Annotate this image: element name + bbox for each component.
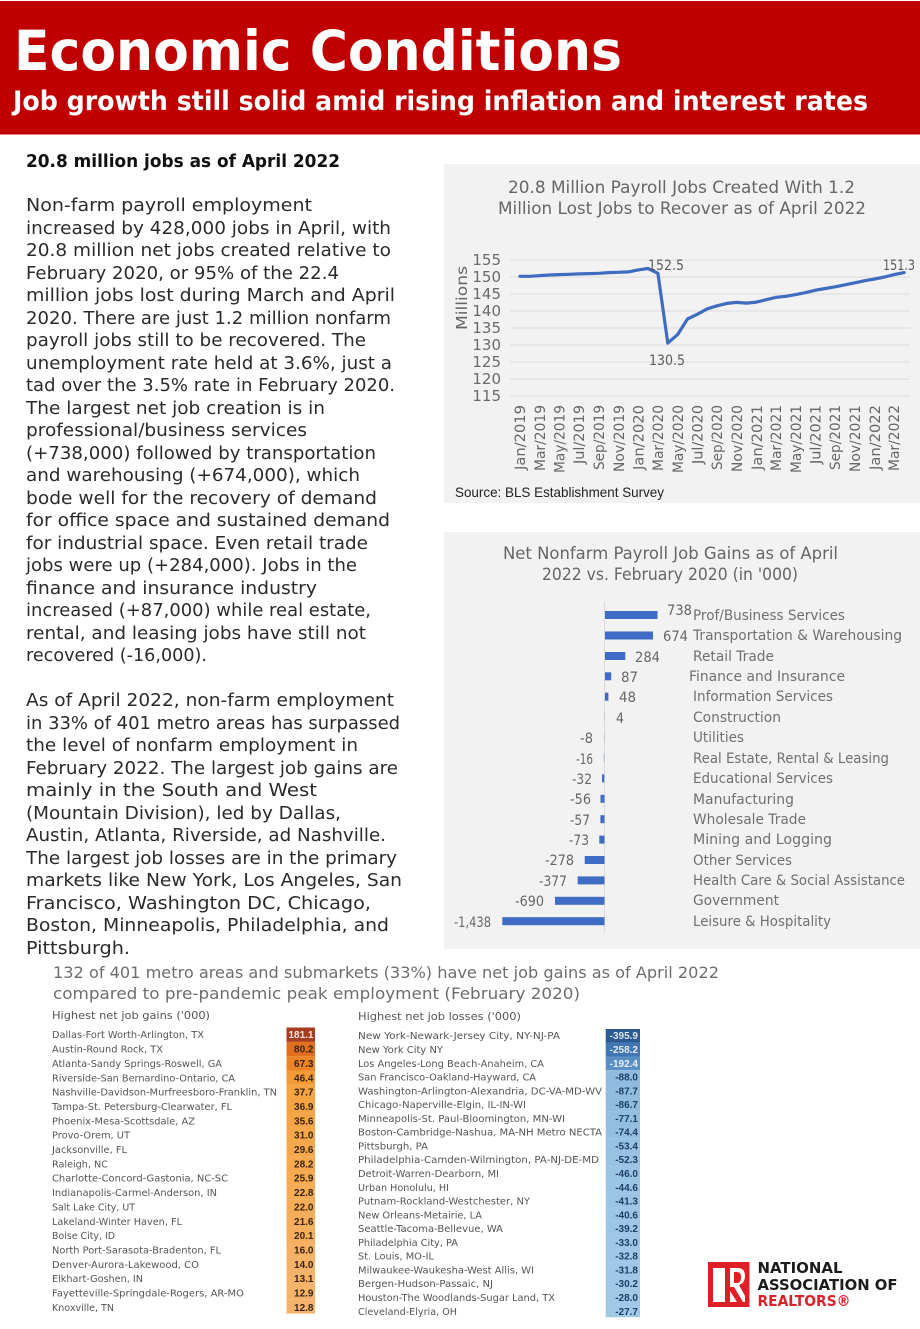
value labels: -32 [572, 772, 592, 788]
value cells: -395.9 [610, 1031, 638, 1042]
metro names: Philadelphia City, PA [358, 1238, 458, 1249]
logo wordmark: ASSOCIATION OF [758, 1276, 898, 1294]
text block: metro areas paragraph: markets like New York, Los Angeles, San [26, 871, 402, 891]
metro names: Indianapolis-Carmel-Anderson, IN [52, 1188, 217, 1199]
category labels: Transportation & Warehousing [692, 628, 902, 644]
x axis labels: Jul/2020 [690, 405, 706, 465]
value labels: -278 [545, 853, 574, 869]
value cells: 37.7 [294, 1088, 314, 1099]
text block: job growth paragraph: tad over the 3.5% rate in February 2020. [26, 376, 395, 396]
metro names: Atlanta-Sandy Springs-Roswell, GA [52, 1059, 222, 1070]
text block: job growth paragraph: recovered (-16,000). [26, 646, 207, 666]
metro names: Riverside-San Bernardino-Ontario, CA [52, 1073, 235, 1084]
title: Economic Conditions [14, 19, 622, 83]
logo: National Association of Realtors [708, 1259, 898, 1310]
text block: metro areas paragraph: Boston, Minneapolis, Philadelphia, and [26, 916, 389, 936]
x axis labels: Jan/2022 [868, 405, 884, 471]
text block: job growth paragraph: increased by 428,000 jobs in April, with [26, 219, 391, 239]
category labels: Utilities [693, 730, 744, 746]
text block: job growth paragraph: February 2020, or 95% of the 22.4 [26, 264, 339, 284]
category labels [689, 608, 905, 930]
panel: payroll jobs line chart [444, 164, 920, 503]
metro names: New York-Newark-Jersey City, NY-NJ-PA [358, 1031, 560, 1042]
text block: job growth paragraph: (+738,000) followed by transportation [26, 444, 376, 464]
metro tables heading: compared to pre-pandemic peak employment (February 2020) [53, 985, 580, 1003]
y axis labels: 130 [472, 336, 501, 354]
category labels: Government [693, 893, 779, 909]
value cells: -39.2 [615, 1224, 638, 1235]
chart title [498, 178, 866, 218]
value cells: 25.9 [294, 1174, 314, 1185]
value labels: 87 [621, 670, 638, 686]
value cells: -87.7 [615, 1086, 638, 1097]
value cells: -46.0 [615, 1169, 638, 1180]
text block: metro areas paragraph: (Mountain Division), led by Dallas, [26, 804, 341, 824]
metro names: Elkhart-Goshen, IN [52, 1274, 143, 1285]
logo wordmark [758, 1259, 898, 1310]
value labels: 48 [619, 690, 636, 706]
metro tables heading: 132 of 401 metro areas and submarkets (33%) have net job gains as of April 2022 [53, 964, 719, 982]
metro names: Detroit-Warren-Dearborn, MI [358, 1169, 499, 1180]
text block: metro areas paragraph: Francisco, Washington DC, Chicago, [26, 894, 371, 914]
value labels: -377 [539, 874, 567, 890]
x axis labels: May/2021 [789, 405, 805, 473]
chart title [503, 544, 838, 584]
icon: R block mark [708, 1262, 750, 1307]
value cells: 28.2 [294, 1159, 314, 1170]
metro names: Knoxville, TN [52, 1303, 114, 1314]
metro names: Dallas-Fort Worth-Arlington, TX [52, 1030, 204, 1041]
metro names: Jacksonville, FL [51, 1145, 128, 1156]
x axis labels [513, 405, 903, 473]
value cells: 46.4 [294, 1073, 314, 1084]
table heading: Highest net job losses ('000) [358, 1011, 521, 1023]
value cells: 181.1 [288, 1030, 314, 1041]
value cells: -33.0 [615, 1238, 638, 1249]
text block: job growth paragraph: rental, and leasing jobs have still not [26, 624, 366, 644]
text block: job growth paragraph: unemployment rate held at 3.6%, just a [26, 354, 392, 374]
category labels: Finance and Insurance [689, 669, 845, 685]
value cells: 29.6 [294, 1145, 314, 1156]
text block: metro areas paragraph: The largest job losses are in the primary [25, 849, 397, 869]
payroll employment line [520, 268, 904, 343]
value cells: -52.3 [615, 1155, 638, 1166]
metro names: Tampa-St. Petersburg-Clearwater, FL [51, 1102, 233, 1113]
text block: job growth paragraph: 2020. There are just 1.2 million nonfarm [26, 309, 391, 329]
value cells: -28.0 [615, 1293, 638, 1304]
metro names: Los Angeles-Long Beach-Anaheim, CA [358, 1059, 544, 1070]
value cells: -31.8 [615, 1266, 638, 1276]
metro names: St. Louis, MO-IL [358, 1252, 435, 1263]
metro names: Milwaukee-Waukesha-West Allis, WI [358, 1266, 534, 1276]
value cells: -32.8 [615, 1252, 638, 1263]
metro names: Bergen-Hudson-Passaic, NJ [358, 1279, 493, 1290]
text block: job growth paragraph: The largest net job creation is in [25, 399, 325, 419]
value cells: 16.0 [294, 1246, 314, 1256]
chart title: Net Nonfarm Payroll Job Gains as of April [503, 544, 838, 563]
data labels: 152.5 [648, 258, 684, 274]
bars [502, 611, 658, 925]
x axis labels: Sep/2020 [710, 405, 726, 470]
metro names: Boise City, ID [52, 1231, 115, 1242]
value cells: 31.0 [294, 1131, 314, 1142]
y axis labels: 155 [472, 251, 501, 269]
table heading: Highest net job gains ('000) [52, 1010, 210, 1022]
text block: job growth paragraph: finance and insurance industry [26, 579, 317, 599]
category labels: Leisure & Hospitality [693, 914, 831, 930]
chart title: 20.8 Million Payroll Jobs Created With 1.2 [508, 178, 855, 197]
metro names: Austin-Round Rock, TX [52, 1045, 163, 1056]
category labels: Mining and Logging [693, 832, 832, 848]
metro names: Nashville-Davidson-Murfreesboro-Franklin, TN [52, 1088, 277, 1099]
value cells: -258.2 [610, 1045, 638, 1056]
metro names: Chicago-Naperville-Elgin, IL-IN-WI [358, 1100, 526, 1111]
value labels: -56 [570, 792, 591, 808]
metro names: San Francisco-Oakland-Hayward, CA [358, 1072, 536, 1084]
metro names: Salt Lake City, UT [52, 1202, 135, 1213]
value cells: -44.6 [615, 1183, 638, 1194]
value cells: 21.6 [294, 1217, 314, 1228]
text block: job growth paragraph: professional/business services [26, 421, 307, 441]
value labels: 738 [667, 603, 692, 619]
metro names: New York City NY [358, 1045, 443, 1056]
metro names: Charlotte-Concord-Gastonia, NC-SC [52, 1174, 228, 1185]
table: highest net job gains [51, 1010, 315, 1314]
category labels: Health Care & Social Assistance [693, 873, 905, 889]
text block: metro areas paragraph: As of April 2022, non-farm employment [26, 691, 394, 711]
x axis labels: Nov/2020 [730, 405, 746, 472]
value cells: 80.2 [294, 1045, 314, 1056]
category labels: Other Services [693, 853, 792, 869]
metro names: Minneapolis-St. Paul-Bloomington, MN-WI [358, 1114, 565, 1125]
text block: metro areas paragraph: Pittsburgh. [26, 939, 130, 959]
section heading: 20.8 million jobs as of April 2022 [26, 151, 340, 172]
text block: metro areas paragraph [25, 691, 402, 959]
value cells: 36.9 [294, 1102, 314, 1113]
metro names: Urban Honolulu, HI [358, 1183, 449, 1194]
subtitle: Job growth still solid amid rising inflation and interest rates [11, 86, 868, 117]
metro names: Denver-Aurora-Lakewood, CO [52, 1260, 199, 1271]
x axis labels: Nov/2021 [848, 405, 864, 472]
value cells: 12.9 [294, 1288, 314, 1300]
value cells: 22.0 [294, 1202, 314, 1213]
x axis labels: May/2020 [671, 405, 687, 473]
metro names: Raleigh, NC [52, 1159, 108, 1170]
x axis labels: Jan/2019 [513, 405, 529, 471]
y axis labels: 125 [472, 353, 501, 371]
category labels: Retail Trade [693, 649, 774, 665]
y axis labels: 115 [472, 387, 501, 405]
x axis labels: Sep/2019 [592, 405, 608, 470]
x axis labels: Mar/2020 [651, 405, 667, 471]
metro names: Cleveland-Elyria, OH [358, 1307, 457, 1318]
metro names: Seattle-Tacoma-Bellevue, WA [358, 1224, 503, 1235]
metro names [358, 1031, 602, 1318]
metro names: Houston-The Woodlands-Sugar Land, TX [358, 1293, 555, 1304]
text block: metro areas paragraph: February 2022. The largest job gains are [26, 759, 398, 779]
x axis labels: Nov/2019 [612, 405, 628, 472]
value labels: 4 [616, 711, 624, 727]
text block: job growth paragraph: increased (+87,000) while real estate, [26, 601, 371, 621]
value labels: -73 [569, 833, 589, 849]
category labels: Manufacturing [693, 792, 794, 808]
header banner [0, 1, 920, 134]
data labels: 130.5 [649, 353, 685, 369]
value labels: 674 [663, 629, 688, 645]
metro names [51, 1030, 277, 1314]
x axis labels: Mar/2019 [533, 405, 549, 471]
text block: job growth paragraph: and warehousing (+674,000), which [26, 466, 360, 486]
x axis labels: Jan/2020 [632, 405, 648, 471]
text block: job growth paragraph: bode well for the recovery of demand [26, 489, 377, 509]
x axis labels: Jan/2021 [750, 405, 766, 471]
text block: job growth paragraph: for industrial space. Even retail trade [26, 534, 368, 554]
logo wordmark: NATIONAL [758, 1259, 843, 1277]
value cells [606, 1029, 640, 1318]
value cells: 22.8 [294, 1188, 314, 1199]
y axis labels: 145 [472, 285, 501, 303]
value cells: -77.1 [615, 1114, 638, 1125]
metro names: Fayetteville-Springdale-Rogers, AR-MO [52, 1288, 244, 1300]
text block: job growth paragraph: jobs were up (+284,000). Jobs in the [25, 556, 357, 576]
x axis labels: Mar/2021 [769, 405, 785, 471]
text block: job growth paragraph [25, 196, 395, 666]
value cells: 20.1 [294, 1231, 314, 1242]
value cells: -88.0 [615, 1072, 638, 1084]
value cells: 12.8 [294, 1303, 314, 1314]
text block: job growth paragraph: 20.8 million net jobs created relative to [26, 241, 391, 261]
value cells: -40.6 [615, 1210, 638, 1221]
value cells: 67.3 [294, 1059, 314, 1070]
category labels: Construction [693, 710, 781, 726]
category labels: Educational Services [693, 771, 833, 787]
x axis labels: Sep/2021 [828, 405, 844, 470]
category labels: Prof/Business Services [693, 608, 845, 624]
text block: metro areas paragraph: mainly in the South and West [26, 781, 317, 801]
value labels: -1,438 [454, 915, 491, 931]
value cells: -53.4 [615, 1141, 638, 1152]
text block: job growth paragraph: for office space and sustained demand [26, 511, 390, 531]
value cells: 14.0 [294, 1260, 314, 1271]
text block: job growth paragraph: payroll jobs still to be recovered. The [26, 331, 366, 351]
text block: metro areas paragraph: the level of nonfarm employment in [26, 736, 358, 756]
metro names: Phoenix-Mesa-Scottsdale, AZ [52, 1116, 195, 1127]
y axis title: Millions [453, 266, 471, 330]
metro names: Washington-Arlington-Alexandria, DC-VA-MD-WV [358, 1086, 602, 1097]
y axis labels: 135 [472, 319, 501, 337]
metro names: Pittsburgh, PA [358, 1141, 428, 1152]
value cells: -74.4 [615, 1128, 638, 1139]
source note: Source: BLS Establishment Survey [455, 484, 664, 500]
data labels [648, 258, 915, 369]
x axis labels: Jul/2019 [572, 405, 588, 465]
text block: metro areas paragraph: in 33% of 401 metro areas has surpassed [26, 714, 400, 734]
text block: metro areas paragraph: Austin, Atlanta, Riverside, ad Nashville. [26, 826, 386, 846]
value cells: -27.7 [615, 1307, 638, 1318]
table: highest net job losses [358, 1011, 640, 1318]
value cells: -41.3 [615, 1197, 638, 1208]
value labels: -57 [570, 813, 590, 829]
x axis labels: May/2019 [552, 405, 568, 473]
panel: net job gains bar chart [444, 532, 920, 949]
text block: job growth paragraph: million jobs lost during March and April [26, 286, 395, 306]
value labels [454, 603, 692, 931]
value labels: -690 [515, 894, 544, 910]
x axis labels: Mar/2022 [887, 405, 903, 471]
chart title: Million Lost Jobs to Recover as of April 2022 [498, 199, 866, 218]
value cells: 35.6 [294, 1116, 314, 1127]
metro names: Boston-Cambridge-Nashua, MA-NH Metro NECTA [358, 1128, 602, 1139]
text block: job growth paragraph: Non-farm payroll employment [26, 196, 312, 216]
metro names: Putnam-Rockland-Westchester, NY [358, 1197, 530, 1208]
category labels: Wholesale Trade [693, 812, 806, 828]
category labels: Real Estate, Rental & Leasing [693, 751, 889, 767]
metro names: New Orleans-Metairie, LA [358, 1210, 482, 1221]
metro names: Provo-Orem, UT [52, 1131, 130, 1142]
value cells: -86.7 [615, 1100, 638, 1111]
value cells [286, 1028, 315, 1314]
metro names: Philadelphia-Camden-Wilmington, PA-NJ-DE-MD [358, 1155, 599, 1166]
y axis labels: 150 [472, 268, 501, 286]
value labels: -8 [580, 731, 593, 747]
metro tables heading [53, 964, 719, 1003]
value cells: -192.4 [610, 1059, 638, 1070]
x axis labels: Jul/2021 [808, 405, 824, 465]
value cells: 13.1 [294, 1274, 314, 1285]
chart title: 2022 vs. February 2020 (in '000) [542, 565, 798, 584]
value cells: -30.2 [615, 1279, 638, 1290]
logo wordmark: REALTORS® [758, 1292, 850, 1310]
y axis labels: 140 [472, 302, 501, 320]
category labels: Information Services [693, 689, 833, 705]
metro names: Lakeland-Winter Haven, FL [52, 1217, 183, 1228]
y axis labels: 120 [472, 370, 501, 388]
metro names: North Port-Sarasota-Bradenton, FL [52, 1246, 222, 1256]
y axis labels [472, 251, 501, 405]
value labels: 284 [635, 650, 660, 666]
value labels: -16 [576, 752, 593, 768]
